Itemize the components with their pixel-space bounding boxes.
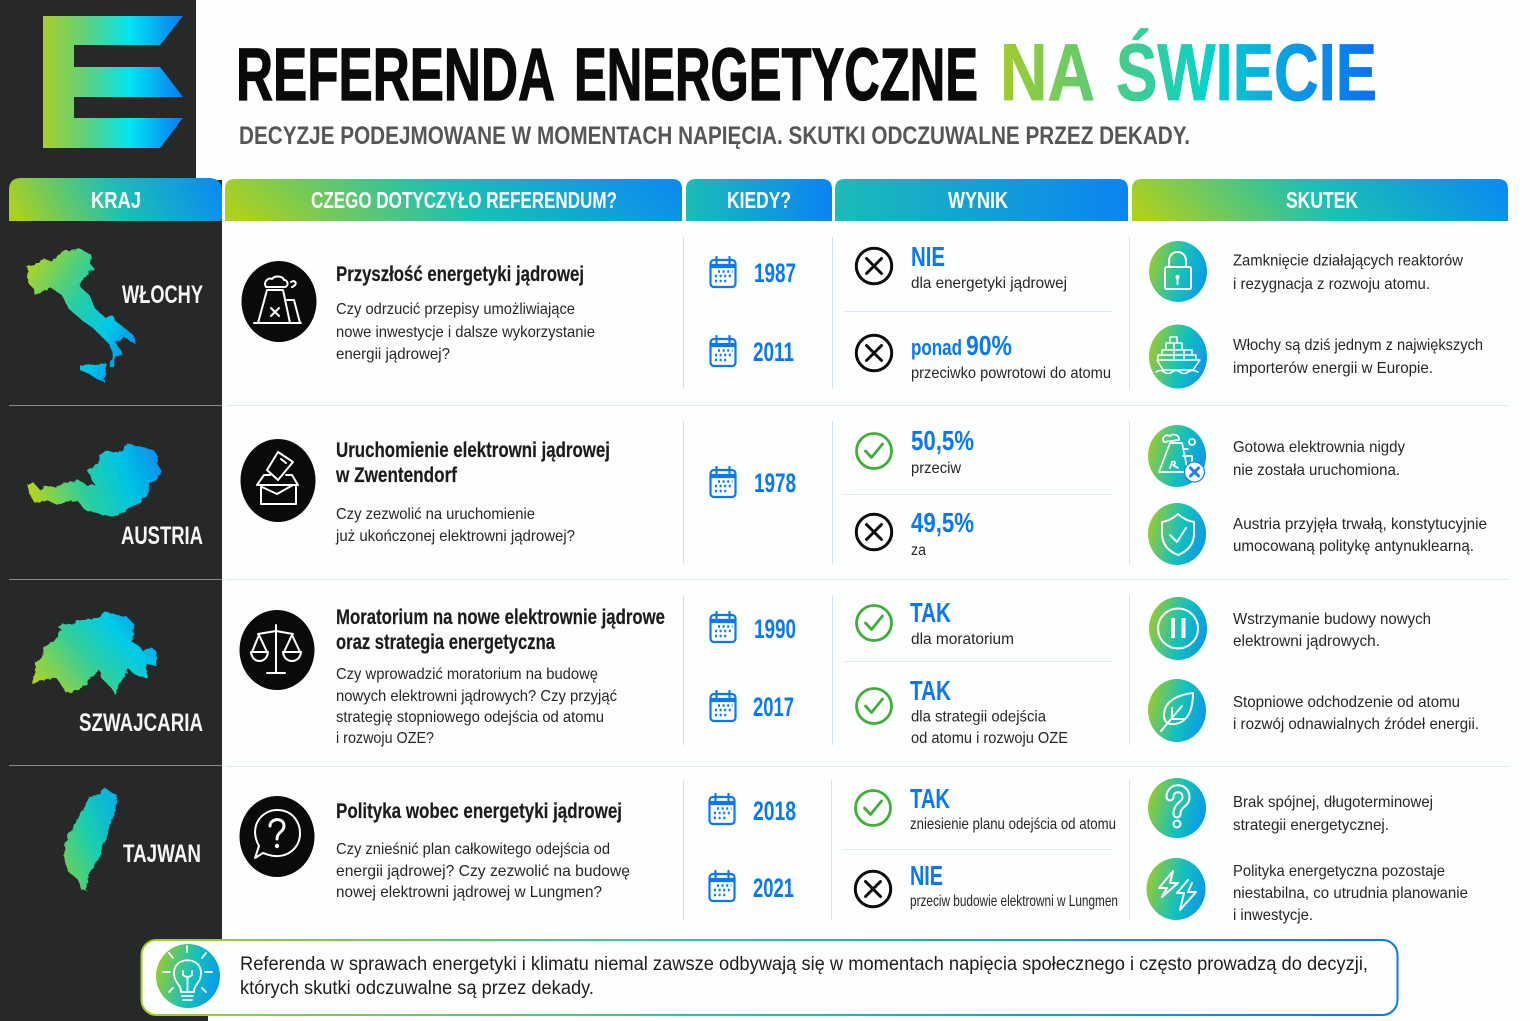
effect: odchodzenie od atomu: i rozwój odnawialnych źródeł energii. [1233,716,1479,733]
country label: AUSTRIA [121,522,203,550]
effect: niestabilna polityka: niestabilna, co utrudnia planowanie [1233,885,1468,902]
header: skutek: SKUTEK [1286,187,1358,213]
question text: Uruchomienie elektrowni jądrowej [336,439,610,462]
icon: scales [240,610,314,690]
effect: import energii: Włochy są dziś jednym z największych [1233,337,1483,354]
result: ponad 90%: ponad [911,335,962,360]
table header [9,178,1508,221]
result: TAK: zniesienie planu odejścia od atomu [910,816,1116,833]
effect: wstrzymanie budowy [1149,597,1431,660]
effect: wstrzymanie budowy: Wstrzymanie budowy nowych [1233,611,1431,628]
map: Austria [27,443,162,517]
date: 2017 [710,691,794,722]
title: ENERGETYCZNE [574,33,978,116]
question text: energii jądrowej? [336,346,450,363]
question text: nowej elektrowni jądrowej w Lungmen? [336,884,602,901]
title: REFERENDA [236,33,555,116]
dark sidebar [0,0,222,1021]
effect: brak strategii: Brak spójnej, długoterminowej [1233,794,1433,811]
result: NIE: dla energetyki jądrowej [911,275,1067,292]
result: NIE [855,860,1118,910]
question text: Polityka wobec energetyki jądrowej [336,800,622,823]
callout text: Referenda w sprawach energetyki i klimatu niemal zawsze odbywają się w momentach napięcia społecznego i często prowadzą do decyzji, [240,954,1368,975]
effect: odchodzenie od atomu: Stopniowe odchodzenie od atomu [1233,694,1460,711]
result: 49,5%: za [911,542,926,559]
date: 1987: 1987 [754,258,796,288]
date: 2021 [710,871,794,903]
row: Austria [27,425,1487,565]
header: kraj [9,178,222,221]
effect: zamknięcie reaktorów [1149,241,1463,302]
result: TAK [856,783,1116,833]
date: 2021: 2021 [753,873,794,903]
effect: niestabilna polityka [1146,858,1468,924]
map: Tajwan [63,787,117,890]
country label: TAJWAN [123,840,201,868]
question text: Czy wprowadzić moratorium na budowę [336,666,598,683]
effect: brak strategii: strategii energetycznej. [1233,817,1389,834]
date: 1978: 1978 [754,468,796,498]
date: 1990: 1990 [754,614,796,644]
question text: Moratorium na nowe elektrownie jądrowe [336,606,665,629]
question text: w Zwentendorf [335,464,458,487]
result: NIE: NIE [911,241,945,272]
effect: elektrownia nieuruchomiona: nie została uruchomiona. [1233,462,1400,479]
country label: SZWAJCARIA [79,709,203,737]
callout text [240,954,1368,999]
effect: import energii [1149,324,1483,388]
question text [335,439,610,545]
date: 2018: 2018 [753,796,796,826]
date: 2011: 2011 [753,337,794,367]
question text: oraz strategia energetyczna [336,631,555,654]
callout: conclusion [142,940,1398,1015]
effect: niestabilna polityka: Polityka energetyczna pozostaje [1233,863,1445,880]
subtitle: DECYZJE PODEJMOWANE W MOMENTACH NAPIĘCIA. SKUTKI ODCZUWALNE PRZEZ DEKADY. [239,122,1190,150]
date: 2011 [710,336,794,367]
result: ponad 90%: przeciwko powrotowi do atomu [911,365,1111,382]
question text: nowe inwestycje i dalsze wykorzystanie [336,324,595,341]
header: czego dotyczyło referendum: CZEGO DOTYCZYŁO REFERENDUM? [311,187,617,213]
result: 49,5%: 49,5% [911,507,974,538]
question text: Przyszłość energetyki jądrowej [336,263,584,286]
result: TAK strategia: od atomu i rozwoju OZE [911,730,1068,747]
effect: polityka antynuklearna: Austria przyjęła trwałą, konstytucyjnie [1233,516,1487,533]
result: 49,5% [856,507,974,559]
country label: WŁOCHY [122,281,203,309]
question text: i rozwoju OZE? [336,730,434,747]
result: 50,5%: przeciw [911,460,961,477]
header: kiedy [686,179,832,221]
header: kiedy: KIEDY? [727,187,791,213]
question text: Czy zezwolić na uruchomienie [336,506,535,523]
effect: import energii: importerów energii w Europie. [1233,360,1433,377]
row: Włochy [27,241,1483,388]
effect: zamknięcie reaktorów: i rezygnacja z rozwoju atomu. [1233,276,1430,293]
date: 2018 [710,794,796,826]
icon: light bulb [156,944,220,1008]
date: 1978 [710,467,796,498]
title [236,27,1377,118]
effect: zamknięcie reaktorów: Zamknięcie działających reaktorów [1233,252,1463,270]
result: NIE: przeciw budowie elektrowni w Lungmen [910,893,1118,910]
result: TAK strategia [856,675,1068,747]
header: skutek [1132,179,1508,221]
effect: polityka antynuklearna: umocowaną politykę antynuklearną. [1233,538,1474,555]
icon: question bubble [240,796,314,877]
map: Szwajcaria [32,611,157,695]
result: 50,5%: 50,5% [911,425,974,456]
question text: Czy znieśnić plan całkowitego odejścia od [336,841,610,858]
effect: niestabilna polityka: i inwestycje. [1233,907,1313,924]
result: ponad 90% [856,330,1111,382]
date: 1987 [710,257,796,288]
effect: odchodzenie od atomu [1148,679,1479,742]
effect: elektrownia nieuruchomiona [1148,425,1405,487]
effect: elektrownia nieuruchomiona: Gotowa elektrownia nigdy [1233,439,1405,456]
result: TAK moratorium [856,597,1014,648]
question text [336,800,630,901]
callout text: których skutki odczuwalne są przez dekady. [240,978,594,999]
question text [336,606,665,747]
icon: ballot box [240,439,316,522]
row: Szwajcaria [32,597,1479,747]
result: TAK strategia: dla strategii odejścia [911,708,1046,726]
result: ponad 90%: 90% [966,330,1012,361]
result: TAK moratorium: TAK [910,597,951,628]
result: TAK moratorium: dla moratorium [911,631,1014,648]
map: Włochy [27,248,135,383]
header: wynik: WYNIK [948,187,1008,213]
row: Tajwan [63,778,1468,924]
question text: już ukończonej elektrowni jądrowej? [335,528,575,545]
result: TAK strategia: TAK [910,675,951,706]
question text: strategię stopniowego odejścia od atomu [336,709,604,726]
effect: wstrzymanie budowy: elektrowni jądrowych. [1233,633,1380,650]
header: wynik [835,179,1128,221]
effect: polityka antynuklearna [1148,503,1487,565]
result: 50,5% [856,425,974,477]
question text: energii jądrowej? Czy zezwolić na budowę [336,863,630,880]
header: kraj: KRAJ [91,187,141,213]
result: TAK: TAK [910,783,950,814]
title: NA [1000,28,1095,118]
question text: Czy odrzucić przepisy umożliwiające [336,301,575,318]
question text [336,263,595,363]
header: czego dotyczyło referendum [225,179,682,221]
logo: gradient letter E [43,16,183,148]
result: NIE: NIE [910,860,943,891]
effect: brak strategii [1148,778,1433,838]
title: ŚWIECIE [1116,27,1377,118]
question text: nowych elektrowni jądrowych? Czy przyjąć [336,688,617,705]
date: 2017: 2017 [753,692,794,722]
icon: nuclear plant [242,261,316,342]
date: 1990 [710,612,796,644]
result: NIE [856,241,1067,292]
